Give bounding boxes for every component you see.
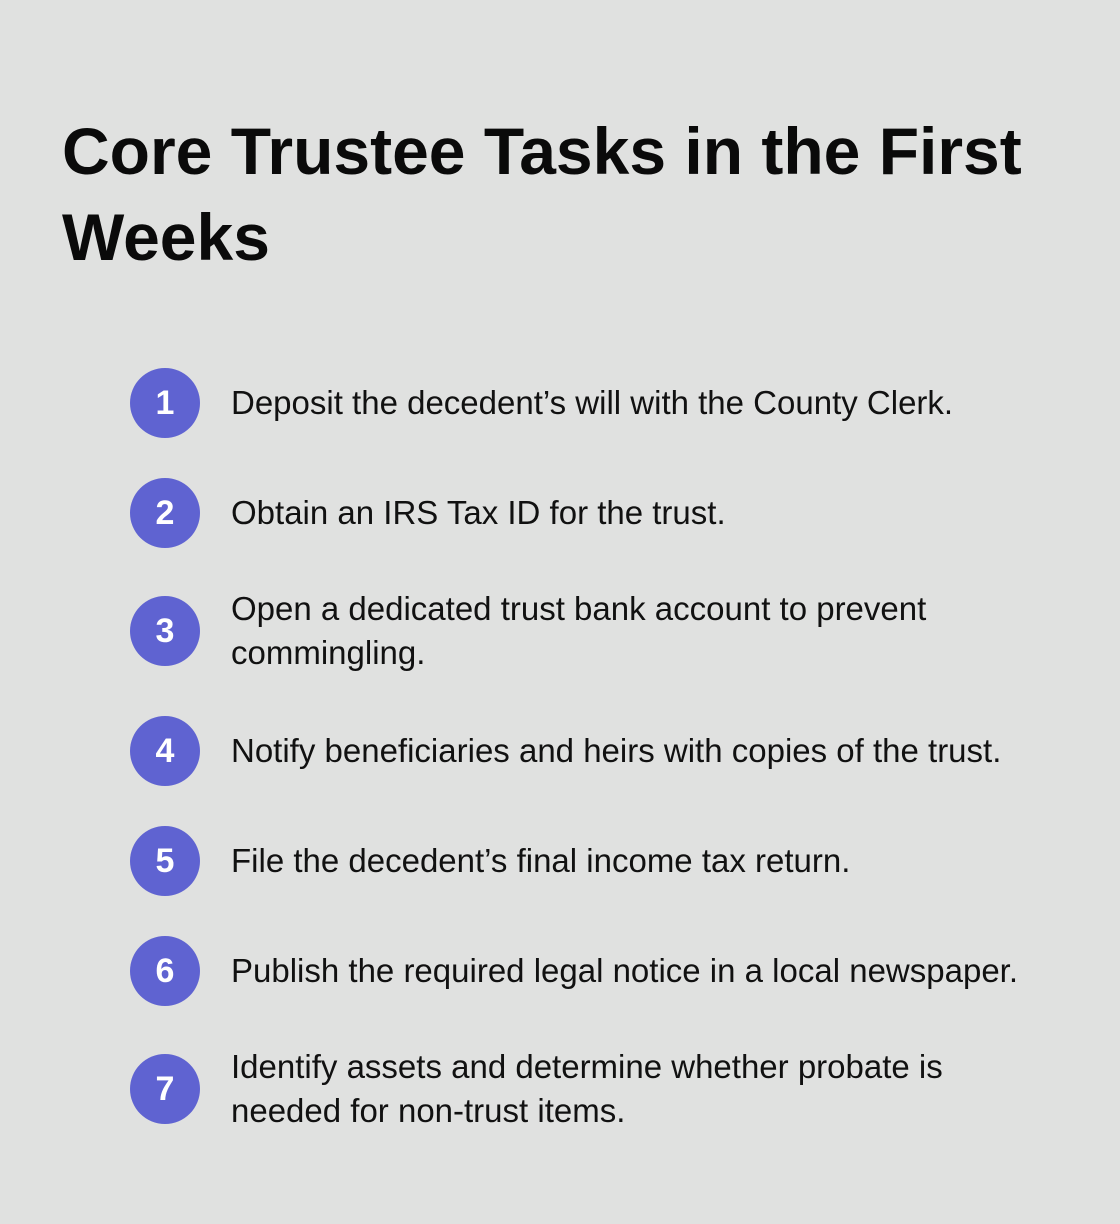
text 5: File the decedent’s final income tax return.	[231, 842, 850, 879]
text 6: Publish the required legal notice in a local newspaper.	[231, 952, 1018, 989]
item 5	[130, 826, 850, 896]
text 2: Obtain an IRS Tax ID for the trust.	[231, 494, 726, 531]
icon: number 2: 2	[156, 494, 174, 532]
icon: number 6: 6	[156, 952, 174, 990]
icon: number 7	[130, 1054, 200, 1124]
icon: number 6	[130, 936, 200, 1006]
text 3: Open a dedicated trust bank account to prevent commingling.	[231, 590, 926, 671]
icon: number 7: 7	[156, 1070, 174, 1108]
item 6	[130, 936, 1018, 1006]
icon: number 1	[130, 368, 200, 438]
text 4: Notify beneficiaries and heirs with copies of the trust.	[231, 732, 1001, 769]
item 3	[130, 590, 926, 671]
icon: number 3	[130, 596, 200, 666]
title: Core Trustee Tasks in the First Weeks	[62, 114, 1022, 274]
icon: number 5	[130, 826, 200, 896]
icon: number 4	[130, 716, 200, 786]
icon: number 1: 1	[156, 384, 174, 422]
item 4	[130, 716, 1001, 786]
text 1: Deposit the decedent’s will with the County Clerk.	[231, 384, 953, 421]
item 1	[130, 368, 953, 438]
icon: number 5: 5	[156, 842, 174, 880]
text 7: Identify assets and determine whether probate is needed for non-trust items.	[231, 1048, 943, 1129]
item 7	[130, 1048, 943, 1129]
icon: number 2	[130, 478, 200, 548]
icon: number 4: 4	[156, 732, 174, 770]
icon: number 3: 3	[156, 612, 174, 650]
item 2	[130, 478, 726, 548]
